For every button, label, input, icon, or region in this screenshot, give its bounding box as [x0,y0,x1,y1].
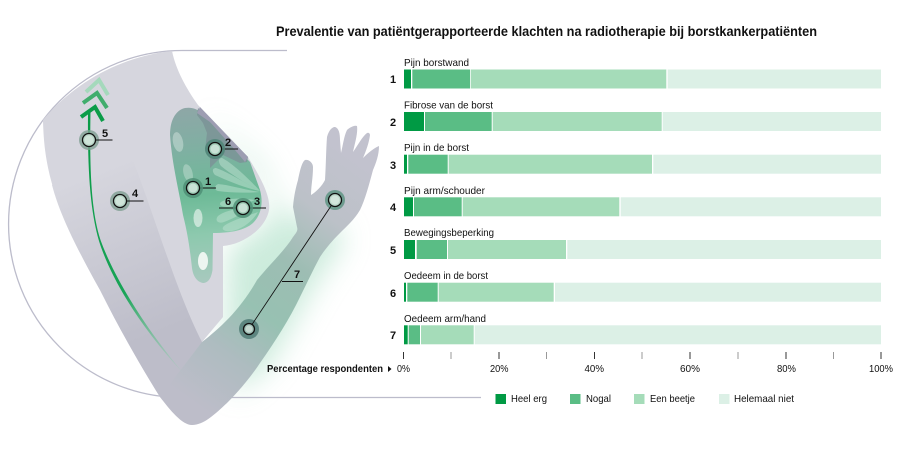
legend: Een beetje [650,393,695,405]
row 4: Pijn arm/schouder: Pijn arm/schouder [404,185,485,197]
body silhouette [43,51,269,397]
row 6: Oedeem in de borst [390,270,881,302]
row 6: Oedeem in de borst: Oedeem in de borst [404,270,488,282]
marker 7 with leader line: 7 [294,269,300,281]
x axis: 20% [490,363,508,375]
row 7: Oedeem arm/hand [390,313,881,344]
x axis: 80% [777,363,796,375]
axis title: Percentage respondenten [267,363,383,375]
row 4: Pijn arm/schouder [390,185,881,216]
row 2: Fibrose van de borst: Fibrose van de borst [404,100,493,112]
green glow [205,112,345,395]
legend: Nogal [586,393,611,405]
marker 1 [183,176,216,198]
marker 4: 4 [132,188,139,200]
marker 2 [205,137,238,159]
breast tissue [170,108,262,283]
row 3: Pijn in de borst: Pijn in de borst [404,142,469,154]
axis arrow [388,366,392,372]
x axis: 40% [584,363,604,375]
row 5: Bewegingsbeperking [390,227,881,259]
row 7: Oedeem arm/hand: Oedeem arm/hand [404,313,486,325]
marker 3 and 6: 3 [254,196,260,208]
row 1: Pijn borstwand [390,57,881,88]
x axis: 0% [397,363,410,375]
marker 2: 2 [225,137,231,149]
upper arm shading [52,140,202,425]
legend [496,393,794,405]
row 3: Pijn in de borst [390,142,881,174]
marker 4 [110,188,144,211]
marker 3 and 6 [219,196,266,218]
panel: anatomy illustration [9,50,481,425]
bar chart [390,57,881,344]
dark tissue around marker 2 [197,108,248,168]
row 1: Pijn borstwand: 1 [390,74,396,86]
title: Prevalentie van patiëntgerapporteerde klachten na radiotherapie bij borstkankerpatiënten [276,23,817,39]
irradiated skin strip [197,107,248,162]
marker 1: 1 [205,176,211,188]
marker 3 and 6: 6 [225,196,231,208]
row 7: Oedeem arm/hand: 7 [390,330,396,342]
forearm and hand [160,126,379,425]
marker 5: 5 [102,128,108,140]
row 5: Bewegingsbeperking: 5 [390,245,396,257]
legend: Helemaal niet [734,393,794,405]
x axis: 60% [680,363,700,375]
row 1: Pijn borstwand: Pijn borstwand [404,57,469,69]
row 2: Fibrose van de borst: 2 [390,117,396,129]
milk ducts [171,131,208,270]
legend: Heel erg [511,393,547,405]
row 5: Bewegingsbeperking: Bewegingsbeperking [404,227,494,239]
row 3: Pijn in de borst: 3 [390,160,396,172]
circle outline [9,50,481,398]
row 2: Fibrose van de borst [390,100,881,131]
marker 7 with leader line [239,190,345,339]
row 4: Pijn arm/schouder: 4 [390,202,397,214]
movement arrow [81,80,184,374]
fan lobes [213,158,260,231]
x axis: 100% [869,363,893,375]
row 6: Oedeem in de borst: 6 [390,288,396,300]
x axis [267,352,893,375]
marker 5 [79,128,112,150]
